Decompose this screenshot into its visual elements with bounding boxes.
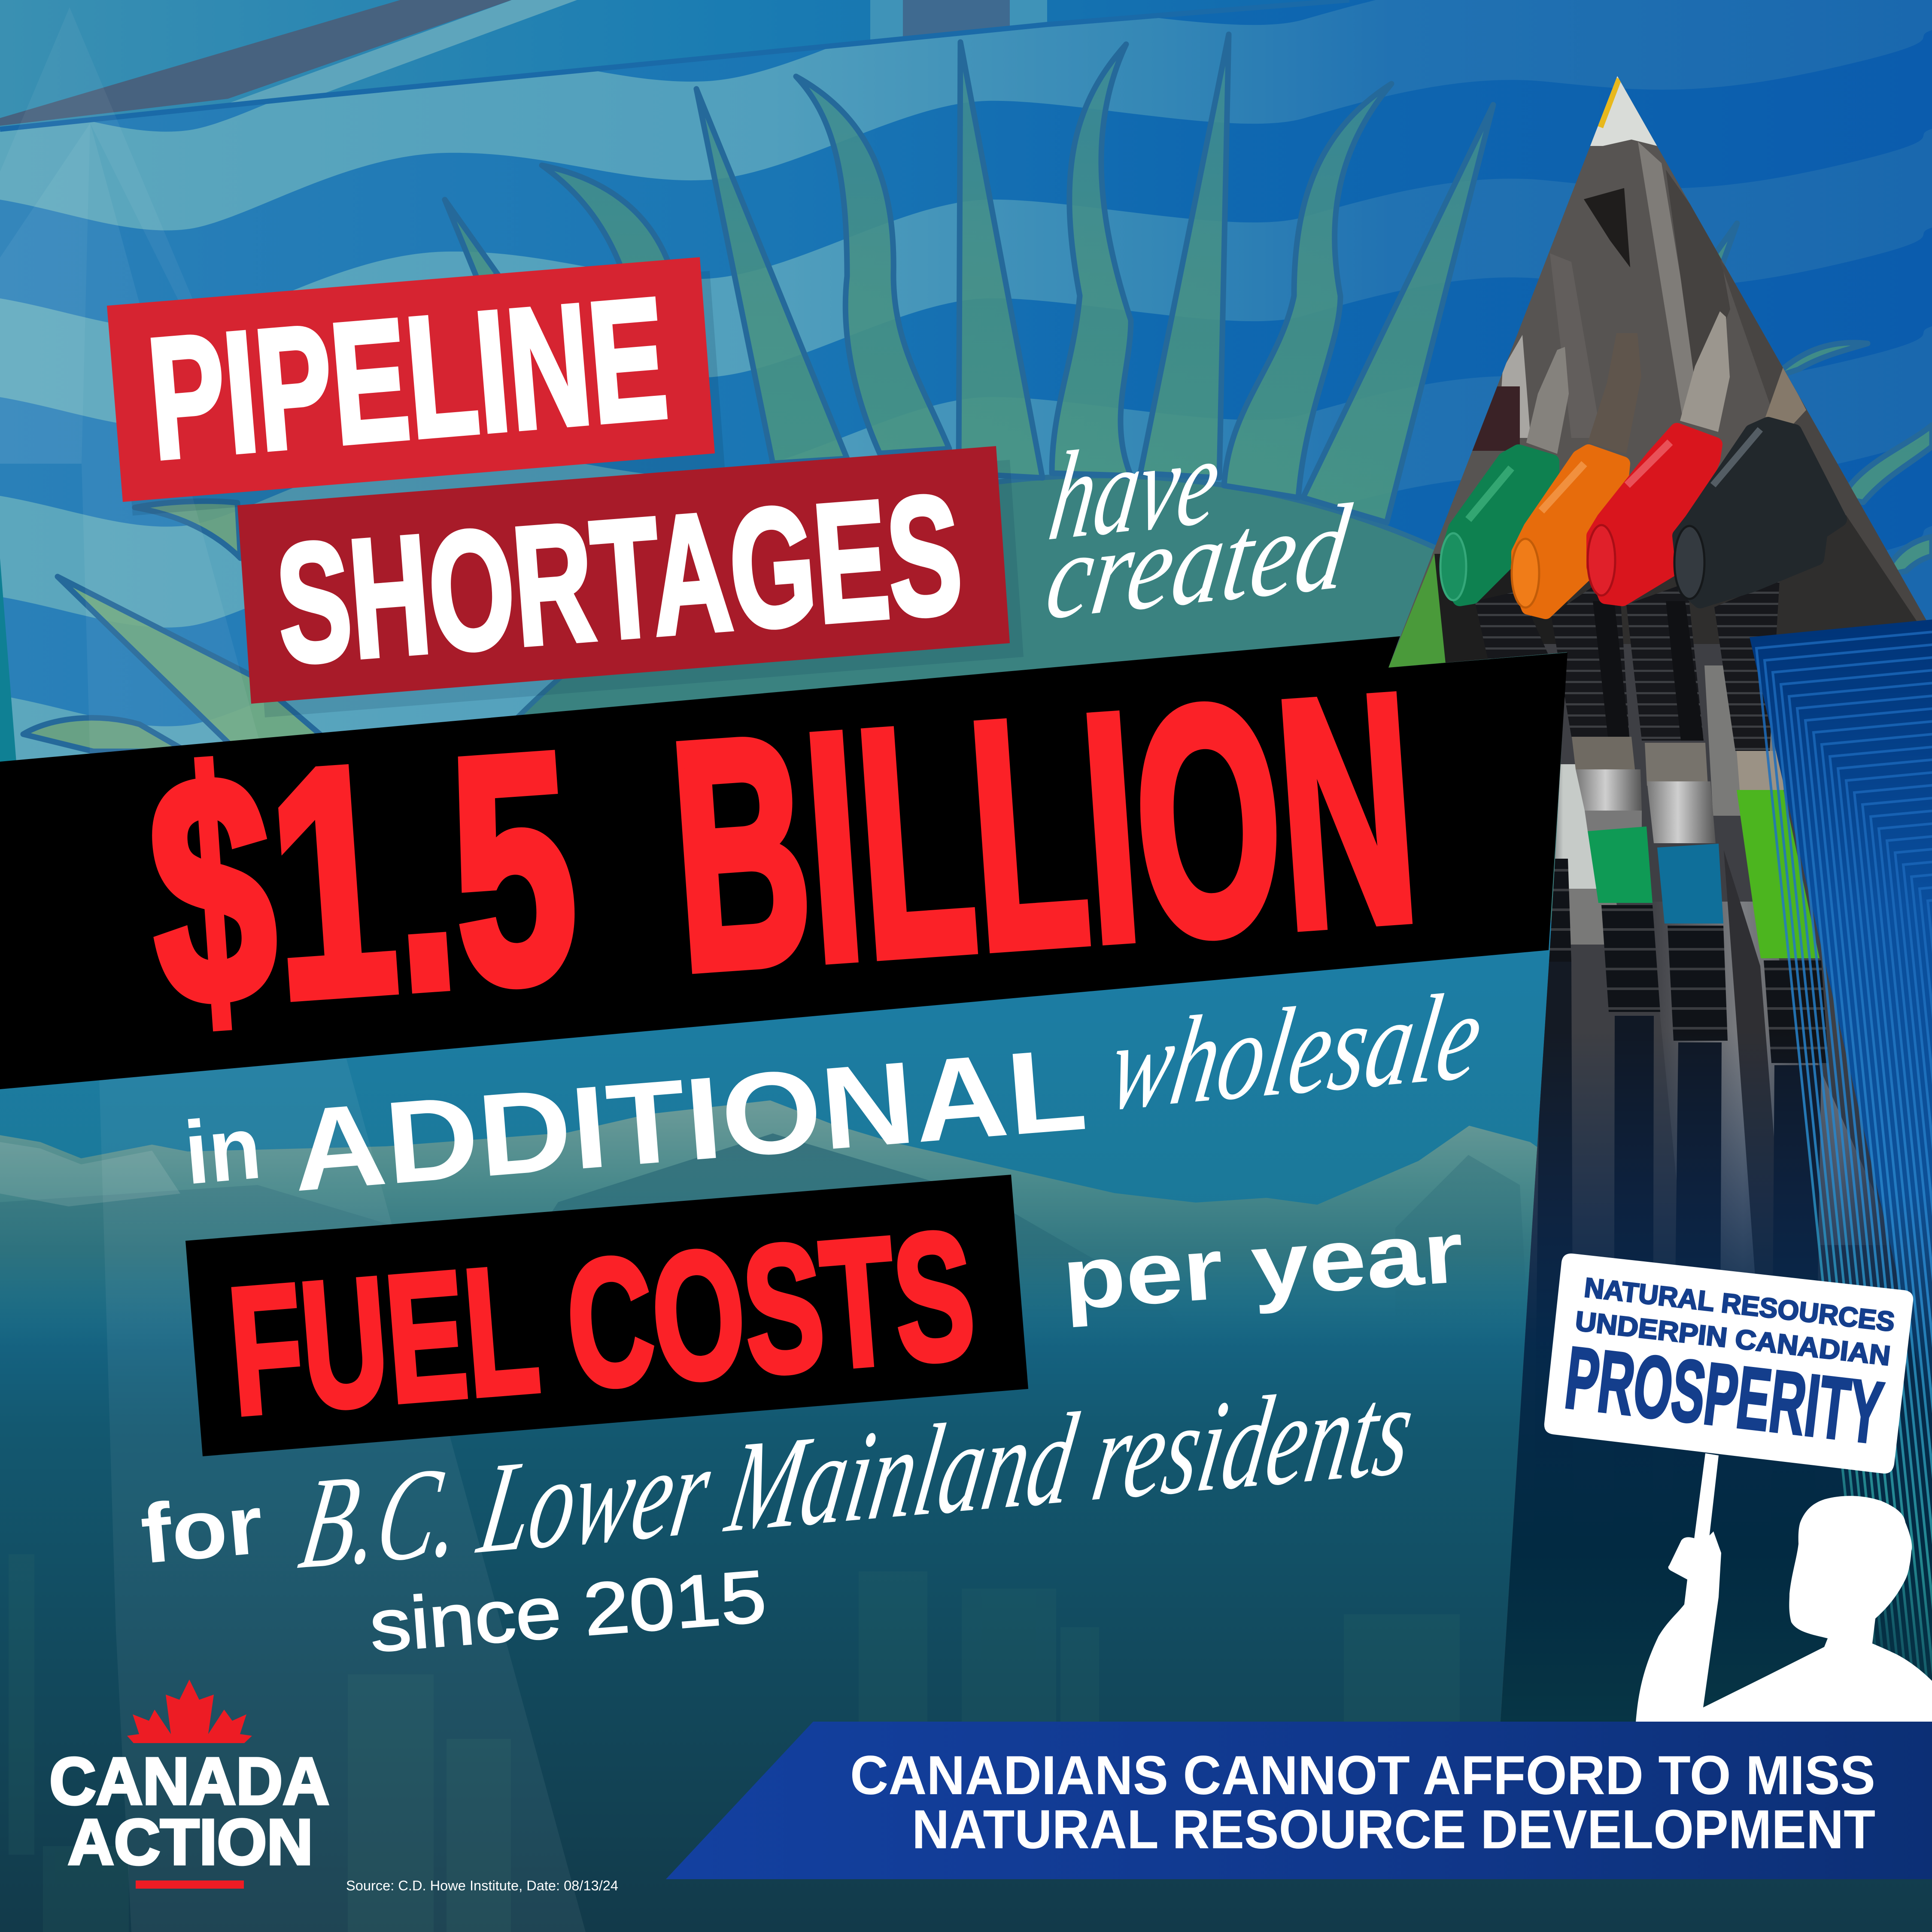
background: flag top corner xyxy=(0,0,1349,129)
heading: SHORTAGES: SHORTAGES xyxy=(270,460,968,699)
text: for B.C. Lower Mainland residents xyxy=(137,1356,1423,1596)
lower photo backdrop xyxy=(1494,644,1932,1722)
blue wedge xyxy=(1750,620,1932,1425)
text: per year: per year xyxy=(1059,1202,1467,1328)
text: in ADDITIONAL wholesale xyxy=(181,964,1491,1216)
blue concentric lines xyxy=(1756,632,1932,1927)
amount: $1.5 BILLION xyxy=(140,626,1426,1074)
logo: Canada Action xyxy=(49,1680,329,1889)
black box: FUEL COSTS xyxy=(185,1175,1028,1456)
green nozzle xyxy=(1440,452,1552,600)
black nozzle xyxy=(1674,424,1840,601)
photo darkening xyxy=(1460,1030,1932,1722)
orange nozzle xyxy=(1512,452,1623,612)
logo red bar xyxy=(136,1880,244,1889)
background: flag waves xyxy=(0,0,1932,760)
text: for B.C. Lower Mainland residents: B.C. Lower Mainland residents xyxy=(292,1356,1423,1596)
text: since 2015: since 2015 xyxy=(367,1555,769,1668)
sign stick xyxy=(1693,1453,1719,1546)
hose 1 with green sleeve xyxy=(1572,737,1660,1674)
protester silhouette xyxy=(1636,1496,1932,1722)
logo word: ACTION: ACTION xyxy=(68,1806,313,1878)
text: FUEL COSTS: FUEL COSTS xyxy=(222,1194,981,1453)
background: city buildings xyxy=(9,1554,1460,1932)
sign text: underpin canadian: UNDERPIN CANADIAN xyxy=(1574,1305,1892,1371)
icon: maple leaf xyxy=(127,1680,252,1743)
pump housing xyxy=(1374,76,1932,670)
background: light beams xyxy=(0,7,586,1932)
source note: Source: C.D. Howe Institute, Date: 08/13/24 xyxy=(346,1878,618,1893)
background: mountains xyxy=(0,1100,1554,1374)
text: for B.C. Lower Mainland residents: for xyxy=(137,1477,267,1581)
background: scene below band xyxy=(0,923,1932,1932)
background: sun rays xyxy=(23,34,1932,751)
amount: $1.5 BILLION: $1.5 xyxy=(140,685,586,1074)
heading: PIPELINE: PIPELINE xyxy=(142,261,673,495)
script text: have created xyxy=(1039,409,1358,645)
hose 2 with blue sleeve xyxy=(1645,743,1728,1674)
banner text line 2: NATURAL RESOURCE DEVELOPMENT xyxy=(912,1799,1875,1860)
green blur at lower left xyxy=(1388,554,1446,668)
background: sun disc xyxy=(368,476,1830,923)
sign text: natural resources: NATURAL RESOURCES xyxy=(1583,1272,1896,1337)
script text: have created: created xyxy=(1039,478,1358,645)
red box: SHORTAGES xyxy=(237,446,1010,704)
hose far left xyxy=(1532,859,1574,1674)
logo word: CANADA: CANADA xyxy=(49,1744,329,1818)
yellow strip xyxy=(1600,79,1619,127)
red nozzle xyxy=(1588,430,1715,599)
black band xyxy=(0,636,1567,1089)
banner text line 1: CANADIANS CANNOT AFFORD TO MISS xyxy=(850,1745,1875,1806)
bottom banner xyxy=(666,1722,1932,1879)
red box: PIPELINE xyxy=(107,257,715,502)
grips xyxy=(1475,569,1780,751)
text: in ADDITIONAL wholesale: in xyxy=(181,1097,265,1203)
text: in ADDITIONAL wholesale: ADDITIONAL xyxy=(288,1023,1091,1216)
text: in ADDITIONAL wholesale: wholesale xyxy=(1101,964,1491,1137)
protest sign xyxy=(1544,1254,1913,1473)
script text: have created: have xyxy=(1042,409,1228,567)
box shadows xyxy=(117,271,1024,717)
photo: fuel pump nozzles xyxy=(1374,64,1932,1722)
background: left edge sliver xyxy=(0,558,17,773)
hose 3 with bright green sleeve xyxy=(1737,751,1829,1674)
metal stems xyxy=(1526,311,1806,454)
